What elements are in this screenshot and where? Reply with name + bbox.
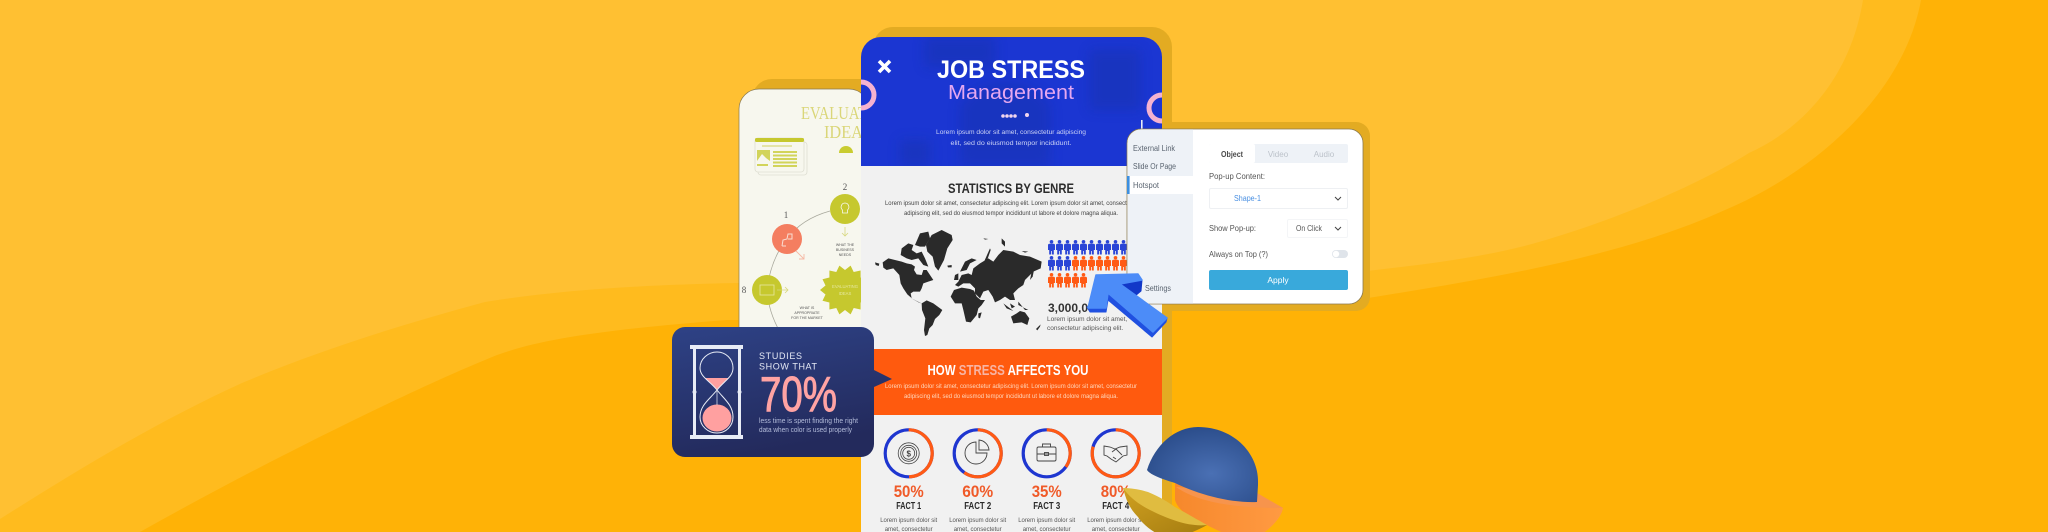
- header: blue banner: [848, 37, 1175, 166]
- title: job stress: JOB STRESS: [937, 56, 1085, 84]
- dropdown: shape-1: Shape-1: [1234, 194, 1261, 203]
- pictogram: people: [1048, 240, 1127, 288]
- label: pop-up content: Pop-up Content:: [1209, 172, 1265, 181]
- callout text: SHOW THAT: [759, 362, 818, 372]
- icon: semicircle: [839, 146, 853, 153]
- orange section body text: adipiscing elit, sed do eiusmod tempor incididunt ut labore et dolore magna aliqua.: [904, 393, 1118, 400]
- arrow: 3d blue cursor: [1087, 274, 1167, 337]
- heading: how stress affects you: HOW STRESS AFFECTS YOU: [928, 362, 1088, 379]
- fact 2: FACT 2: [964, 501, 992, 512]
- fact 4: FACT 4: [1102, 501, 1130, 512]
- step 8: 8: [742, 285, 747, 295]
- panel: evaluating ideas card: [738, 79, 861, 327]
- callout: studies show that 70%: [672, 327, 892, 457]
- row: show pop-up: On Click: [1296, 224, 1323, 233]
- stat: 3,000,000: consectetur adipiscing elit.: [1047, 325, 1123, 332]
- statistics body text: Lorem ipsum dolor sit amet, consectetur adipiscing elit. Lorem ipsum dolor sit amet, consectetur: [885, 200, 1138, 207]
- fact 4: 80%: [1101, 483, 1131, 501]
- heading: evaluating ideas: IDEAS: [824, 122, 872, 142]
- fact 2: [949, 430, 1006, 532]
- callout text: data when color is used properly: [759, 425, 852, 434]
- sidebar menu: Slide Or Page: [1133, 162, 1176, 171]
- row: always on top: [1209, 250, 1348, 259]
- step 2: WHAT THE: [836, 243, 855, 247]
- fact 2: Lorem ipsum dolor sit: [949, 517, 1006, 524]
- statistics body text: adipiscing elit, sed do eiusmod tempor incididunt ut labore et dolore magna aliqua.: [904, 210, 1118, 217]
- callout text: [759, 351, 859, 434]
- step 2: 2: [843, 182, 847, 192]
- header body text: Lorem ipsum dolor sit amet, consectetur adipiscing: [936, 129, 1086, 136]
- starburst: evaluating ideas: IDEAS: [839, 291, 851, 296]
- step 1: [772, 210, 804, 259]
- sidebar menu: External Link: [1133, 144, 1176, 153]
- illustration: 3d sphere pieces: [1123, 427, 1283, 532]
- callout text: 70%: [760, 368, 837, 422]
- sidebar menu: [1127, 129, 1193, 304]
- icon: close x: [879, 61, 890, 72]
- fact 3: [1018, 430, 1075, 532]
- world map: [875, 230, 1042, 336]
- section: facts: [861, 415, 1162, 532]
- heading: evaluating ideas: [801, 107, 861, 138]
- orange section body text: [885, 383, 1138, 400]
- heading: evaluating ideas: EVALUATING: [801, 103, 893, 123]
- tabs: Audio: [1314, 150, 1335, 159]
- row: always on top: Always on Top (?): [1209, 250, 1268, 259]
- header body text: [936, 129, 1086, 147]
- fact 1: $: [906, 450, 911, 458]
- caption: appropriate for the market: APPROPRIATE: [794, 311, 820, 315]
- header body text: elit, sed do eiusmod tempor incididunt.: [950, 140, 1072, 147]
- icon: browser window: [755, 138, 807, 175]
- sidebar menu: Hotspot: [1133, 181, 1160, 190]
- sidebar menu: Settings: [1145, 284, 1171, 293]
- gold bowl: [1123, 488, 1207, 532]
- fact 3: FACT 3: [1033, 501, 1061, 512]
- step 8: [742, 275, 788, 305]
- stat: 3,000,000: 3,000,000: [1048, 301, 1102, 315]
- statistics body text: [886, 200, 1127, 216]
- caption: appropriate for the market: [791, 306, 823, 319]
- section: how stress affects you: [861, 349, 1162, 415]
- starburst: evaluating ideas: EVALUATING: [832, 284, 858, 289]
- caption: appropriate for the market: FOR THE MARKET: [791, 316, 824, 320]
- icon: hourglass: [690, 347, 743, 437]
- fact 1: 50%: [894, 483, 924, 501]
- subtitle: management: Management: [948, 82, 1074, 104]
- dots: [1001, 113, 1029, 118]
- orange bowl: [1175, 483, 1283, 532]
- fact 1: FACT 1: [896, 501, 922, 512]
- tabs: Object: [1221, 150, 1243, 159]
- fact 4: [1087, 430, 1144, 532]
- stat: 3,000,000: [1047, 304, 1127, 332]
- fact 1: [880, 430, 937, 532]
- card shadows: [873, 27, 1370, 532]
- button: apply: [1209, 270, 1348, 290]
- step 2: BUSINESS: [836, 248, 855, 252]
- fact 4: Lorem ipsum dolor sit: [1087, 517, 1144, 524]
- panel: job stress infographic: [848, 37, 1175, 532]
- panel: hotspot settings: [1127, 120, 1363, 304]
- decorative pink rings: [861, 80, 876, 110]
- fact 1: Lorem ipsum dolor sit: [880, 517, 937, 524]
- flow connector line: [767, 211, 830, 332]
- fact 3: Lorem ipsum dolor sit: [1018, 517, 1075, 524]
- orange section body text: Lorem ipsum dolor sit amet, consectetur adipiscing elit. Lorem ipsum dolor sit amet, consectetur: [885, 383, 1138, 390]
- dropdown: shape-1: [1210, 188, 1348, 208]
- stat: 3,000,000: Lorem ipsum dolor sit amet,: [1047, 316, 1127, 323]
- tabs: Video: [1268, 150, 1289, 159]
- row: show pop-up: Show Pop-up:: [1209, 224, 1256, 233]
- callout text: STUDIES: [759, 351, 802, 361]
- step 2: NEEDS: [839, 253, 852, 257]
- fact 3: 35%: [1032, 483, 1062, 501]
- button: apply: Apply: [1267, 275, 1289, 285]
- blue dome: [1147, 427, 1258, 502]
- caption: appropriate for the market: WHAT IS: [800, 306, 815, 310]
- step 2: [830, 182, 860, 257]
- section: statistics by genre: [861, 166, 1162, 349]
- step 1: 1: [784, 210, 788, 220]
- fact 2: 60%: [962, 483, 994, 501]
- starburst: evaluating ideas: [820, 266, 861, 314]
- heading: statistics by genre: STATISTICS BY GENRE: [948, 180, 1074, 196]
- row: show pop-up: [1209, 220, 1348, 238]
- callout text: less time is spent finding the right: [759, 416, 859, 425]
- tabs: [1209, 144, 1348, 163]
